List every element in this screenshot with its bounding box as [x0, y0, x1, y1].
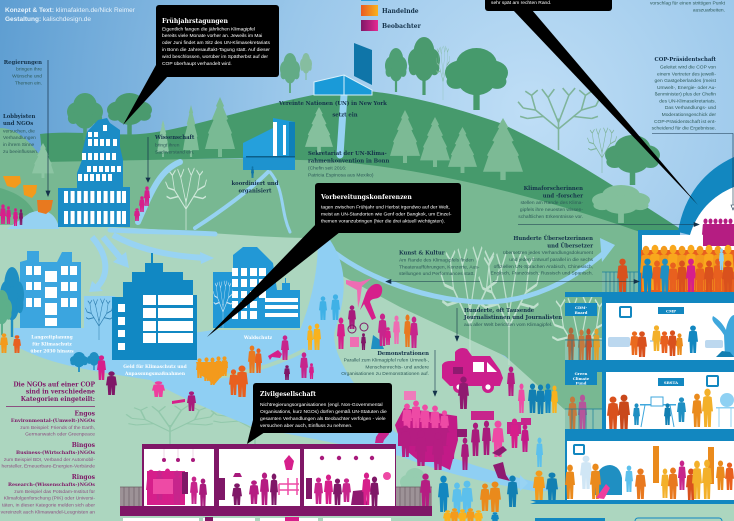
trees around planning buildings	[0, 267, 233, 372]
text: Sekretariat: Patricia Espinosa aus Mexiko)	[308, 172, 374, 178]
text: Kunst und Kultur	[399, 250, 480, 277]
label: Green Climate Fund: Fund	[576, 380, 587, 386]
text: Übersetzer: offiziellen UN-Sprachen Arabisch, Chinesisch,	[494, 264, 593, 270]
text: Sekretariat: (Chefin seit 2016:	[308, 166, 346, 172]
text: COP-Präsidentschaft	[652, 56, 717, 132]
text: COP-Präsidentschaft: Umwelt-, Energie- oder Au-	[657, 85, 716, 91]
patch of green at lower left	[0, 188, 36, 216]
text: COP-Präsidentschaft: des UN-Klimasekretariats.	[659, 98, 716, 104]
arrow: Übersetzer	[493, 280, 639, 284]
label: Geld für Klimaschutz: Geld für Klimaschutz und	[123, 365, 187, 370]
text: Kunst und Kultur: stellungen und Performances statt.	[399, 271, 475, 277]
callout: Zivilgesellschaft	[247, 383, 392, 444]
text: Sekretariat	[308, 151, 390, 178]
text: Klimaforscher: Klimaforscherinnen	[524, 186, 583, 192]
panel: NGO categories: sind in verschiedene	[26, 388, 95, 396]
background trees	[32, 37, 660, 503]
building floors and rooms	[565, 292, 734, 500]
text: Klimaforscher: stellen am Rande des Klima-	[520, 200, 583, 206]
people: magenta observers left	[0, 186, 150, 226]
room: Engo	[146, 449, 207, 506]
callout: Vorbereitungskonferenzen: meist an UN-Standorten wie Genf oder Bangkok, um Einzel-	[321, 212, 452, 218]
text: Lobbyisten: Verhandlungen	[3, 135, 36, 141]
icons: screens	[574, 307, 718, 454]
panel: NGO categories: Kategorien eingeteilt:	[21, 396, 95, 403]
panel: NGO categories: Business-(Wirtschafts-)NGOs	[16, 449, 95, 456]
text: Sekretariat: Sekretariat der UN-Klima-	[308, 151, 387, 157]
callout: top middle	[485, 0, 698, 205]
callout: Frühjahrstagungen: Eigentlich fangen die jährlichen Klimagipfel	[162, 26, 255, 32]
text: Demonstrationen: Organisationen zu Demonstrationen auf.	[341, 371, 429, 377]
legend: Beobachter	[382, 23, 422, 30]
callout: Zivilgesellschaft: Organisations, kurz NGOs) dürfen gemäß UN-Statuten die	[260, 409, 387, 415]
building: UN New York	[314, 43, 372, 95]
callout: Frühjahrstagungen: in Bonn die Jahresauftakt-Tagung statt. Auf dieser	[162, 47, 270, 53]
text: right top: auszuarbeiten.	[693, 8, 725, 14]
text: COP-Präsidentschaft: einem Vertreter des jeweili-	[657, 71, 716, 77]
callout: Zivilgesellschaft: Zivilgesellschaft	[260, 391, 316, 398]
COP building roof line	[638, 230, 680, 292]
callout: Zivilgesellschaft: gesamten Verhandlungen als Beobachter verfolgen - viele	[260, 416, 386, 422]
dark green back hill	[40, 89, 682, 232]
arrow: Wissenschaft	[146, 137, 150, 182]
legend: Handelnde	[382, 8, 419, 15]
people: orange lobby groups top left	[3, 176, 53, 214]
label: Green Climate Fund: Green	[575, 371, 588, 376]
text: Lobbyisten	[3, 114, 38, 155]
text: COP-Präsidentschaft: Das Verhandlungs- und	[665, 105, 716, 111]
text: Journalisten	[463, 308, 562, 328]
text: Demonstrationen: Demonstrationen	[377, 351, 429, 357]
text: Lobbyisten: zu beeinflussen.	[3, 149, 38, 155]
text: Wissenschaft: Sachverstand ein.	[155, 150, 194, 156]
text: koordiniert: organisiert	[239, 188, 272, 194]
room 1: CMP meeting	[608, 315, 734, 357]
credits: Gestaltung: kalischdesign.de	[5, 16, 91, 23]
label: Green Climate Fund	[565, 371, 597, 386]
text: COP-Präsidentschaft: ßenminister) plus der Chefin	[655, 92, 716, 98]
credits: Konzept & Text: klimafakten.de/Nick Reimer	[5, 7, 136, 14]
callout: Zivilgesellschaft: versuchen aber auch, Einfluss zu nehmen.	[260, 423, 352, 429]
text: COP-Präsidentschaft: Geleitet wird die COP von	[660, 64, 716, 70]
callout: Vorbereitungskonferenzen: themen voranzubringen (hier die drei aktuell wichtigsten).	[321, 218, 445, 224]
rivers and streams	[10, 95, 605, 302]
crouching photographer	[375, 427, 389, 443]
text: Kunst und Kultur: Kunst & Kultur	[399, 250, 445, 256]
callout: Frühjahrstagungen: bereits viele Monate vorher an. Jeweils im Mai	[162, 33, 262, 39]
callout: Vorbereitungskonferenzen: Vorbereitungskonferenzen	[320, 194, 412, 201]
panel: NGO categories: Die NGOs auf einer COP	[13, 382, 95, 388]
text: Regierungen: bringen ihre	[16, 66, 42, 72]
pale meadow ground	[0, 225, 734, 521]
callout: Frühjahrstagungen	[123, 5, 279, 125]
text: Vereinte Nationen: Vereinte Nationen (UN) in New York	[278, 100, 387, 107]
text: Kunst und Kultur: Theateraufführungen, Konzerte, Aus-	[399, 264, 480, 270]
building: main tiered government tower	[58, 118, 130, 227]
building: civil society	[120, 444, 432, 521]
arrow: Regierungen	[46, 60, 50, 196]
building: climate finance	[112, 253, 197, 360]
callout: Frühjahrstagungen: Frühjahrstagungen	[162, 18, 229, 25]
balcony: COP presidency	[602, 259, 638, 292]
label: Waldschutz: Waldschutz	[243, 336, 273, 341]
light green lower hill	[0, 128, 640, 440]
text: Journalisten: Hunderte, oft Tausende	[464, 308, 535, 314]
label: Green Climate Fund: Climate	[573, 376, 590, 381]
balcony person	[420, 474, 431, 506]
label: Langzeitplanung: Langzeitplanung	[31, 336, 73, 340]
panel: NGO categories: zum Beispiel BDI, Verband der Automobil-	[4, 457, 95, 463]
panel: NGO categories: Research-(Wissenschafts-)NGOs	[8, 481, 95, 488]
panel: NGO categories: hersteller, Erneuerbare-Energien-Verbände	[1, 464, 95, 470]
text: Lobbyisten: versuchen, die	[3, 128, 35, 134]
text: Kunst und Kultur: Am Rande des Klimagipfels finden	[399, 258, 474, 264]
room: Bingo	[219, 455, 299, 505]
ground strip	[530, 500, 734, 504]
panel: NGO categories: zum Beispiel das Potsdam-Institut für	[14, 489, 95, 495]
text: Wissenschaft: Wissenschaft	[154, 135, 195, 141]
text: Übersetzer: und jeden Entwurf parallel in die sechs	[509, 257, 594, 263]
arrow: Kunst und Kultur	[386, 280, 480, 284]
label: CDM Board: CDM-	[575, 305, 587, 310]
pale path across lake	[205, 350, 305, 378]
central lake	[14, 240, 562, 492]
text: koordiniert	[232, 181, 279, 194]
text: Übersetzer	[491, 235, 594, 276]
balcony groups	[565, 328, 602, 429]
panel: NGO categories: Environmental-(Umwelt-)NGOs	[11, 417, 95, 424]
text: Klimaforscher: und -forscher	[543, 194, 583, 200]
text: Regierungen: Themen ein.	[15, 80, 42, 86]
text: Regierungen	[4, 60, 42, 86]
icon: media van	[442, 348, 515, 409]
text: Lobbyisten: Lobbyisten	[3, 114, 36, 120]
building: forest protection	[213, 247, 300, 328]
callout: Frühjahrstagungen: oder Juni findet am Sitz des UN-Klimasekretariats	[162, 40, 270, 46]
text: Vereinte Nationen: setzt ein	[332, 112, 358, 118]
bottom rooms of COP	[535, 518, 722, 521]
text: Übersetzer: übersetzen jedes Verhandlungsdokument	[503, 250, 594, 256]
text: Klimaforscher: gipfels ihre neuesten wissen-	[520, 207, 583, 213]
credits	[5, 7, 136, 23]
panel: NGO categories: täten, in dieser Kategorie melden sich aber	[2, 502, 95, 508]
panel: NGO categories: Klimafolgenforschung (PIK) oder Universi-	[4, 496, 95, 502]
text: Wissenschaft: bringt ihren	[155, 142, 180, 148]
people: demonstration crowd	[395, 391, 521, 470]
callout: top middle: sehr spät am rechten Rand.	[491, 0, 551, 6]
text: COP-Präsidentschaft: scheidend für die Ergebnisse.	[652, 126, 716, 132]
text: Übersetzer: Hunderte Übersetzerinnen	[513, 235, 593, 242]
callout: Frühjahrstagungen: wird beschlossen, worüber im Spätherbst auf der	[162, 54, 268, 60]
panel: NGO categories: Ringos	[72, 474, 96, 481]
label: SBSTA	[658, 378, 684, 386]
text: Regierungen: Wünsche und	[12, 74, 42, 80]
label: Geld für Klimaschutz	[123, 365, 187, 377]
text: COP-Präsidentschaft: COP-Präsidentschaft	[654, 56, 717, 63]
text: right top: vorschlag für einen strittigen Punkt	[650, 0, 726, 6]
text: koordiniert: koordiniert und	[232, 181, 279, 187]
text: COP-Präsidentschaft: COP-Präsidentschaft ist ent-	[654, 119, 716, 125]
callout: Frühjahrstagungen: COP überhaupt verhandelt wird.	[162, 61, 232, 67]
callout: Zivilgesellschaft: Nichtregierungsorganisationen (engl. Non-Governmental	[260, 402, 383, 408]
text: right top	[650, 0, 726, 14]
text: Demonstrationen: Menschenrechts- und andere	[365, 364, 429, 370]
text: Übersetzer: und Übersetzer	[547, 242, 593, 250]
room: Ringo	[306, 456, 391, 507]
label: CMP: CMP	[666, 308, 676, 314]
callout: Vorbereitungskonferenzen	[207, 183, 461, 337]
text: Übersetzer: Englisch, Französisch, Russisch und Spanisch.	[491, 270, 593, 276]
COP building dome	[678, 157, 734, 235]
label: CDM Board: Board	[575, 310, 588, 315]
legend	[361, 0, 422, 31]
text: Journalisten: aus aller Welt berichten vom Klimagipfel.	[464, 322, 552, 328]
panel: NGO categories: Germanwatch oder Greenpeace	[25, 432, 95, 438]
text: Sekretariat: rahmenkonvention in Bonn	[308, 158, 390, 164]
text: Lobbyisten: und NGOs	[3, 121, 33, 127]
panel: NGO categories: zum Beispiel: Friends of the Earth,	[20, 425, 95, 431]
label: Langzeitplanung: über 2030 hinaus	[30, 350, 74, 354]
label: CMP	[658, 307, 684, 314]
label: Geld für Klimaschutz: Anpassungsmaßnahmen	[124, 372, 186, 377]
people: culture performers	[337, 278, 418, 350]
room 2: SBSTA meeting	[607, 389, 734, 429]
arrow head of river	[600, 238, 615, 262]
text: COP-Präsidentschaft: Moderationsgeschick der	[662, 112, 716, 118]
text: Demonstrationen: Parallel zum Klimagipfel rufen Umwelt-,	[344, 358, 429, 364]
text: Klimaforscher: schaftlichen Erkenntnisse vor.	[518, 214, 583, 220]
arrow: COP-Präsidentschaft	[652, 134, 734, 210]
panel: NGO categories: Engos	[74, 410, 96, 418]
arrow: Demonstrationen	[433, 350, 437, 396]
panel: NGO categories: Bingos	[72, 442, 96, 449]
dome white interior	[690, 187, 734, 240]
text: Lobbyisten: in ihrem Sinne	[3, 142, 35, 148]
label: SBSTA: SBSTA	[664, 380, 678, 385]
people near bottom middle	[438, 462, 518, 521]
text: Wissenschaft	[154, 135, 195, 156]
arrow: Journalisten	[455, 308, 459, 341]
label: Langzeitplanung	[30, 336, 74, 354]
building: Bonn secretariat	[243, 118, 295, 178]
panel: NGO categories: vereinzelt auch Klimawandel-Leugnisten an	[1, 510, 95, 516]
people: observers in dome	[702, 218, 734, 246]
people around lake left side	[0, 294, 340, 411]
panel: NGO categories	[1, 382, 96, 516]
hall 3: lobby	[565, 446, 734, 500]
arrow: Klimaforscher	[518, 222, 699, 226]
panel: COP main floor	[640, 235, 734, 292]
label: Langzeitplanung: für Klimaschutz	[32, 342, 72, 348]
callout: Vorbereitungskonferenzen: tagen zwischen Frühjahr und Herbst irgendwo auf der Welt,	[321, 204, 450, 210]
text: Vereinte Nationen	[278, 100, 387, 118]
text: COP-Präsidentschaft: gen Gastgeberlandes (meist	[655, 78, 717, 84]
people: COP delegates crowd	[640, 245, 734, 292]
people outside COP building	[518, 384, 558, 501]
text: Journalisten: Journalistinnen und Journalisten	[463, 315, 562, 321]
building: long-term planning	[20, 251, 81, 328]
text: Regierungen: Regierungen	[4, 60, 42, 66]
text: Klimaforscher	[518, 186, 583, 220]
curved arrows	[92, 235, 205, 288]
arrow heads	[89, 252, 214, 292]
text: Demonstrationen	[341, 351, 429, 377]
label: CDM Board	[565, 303, 597, 316]
